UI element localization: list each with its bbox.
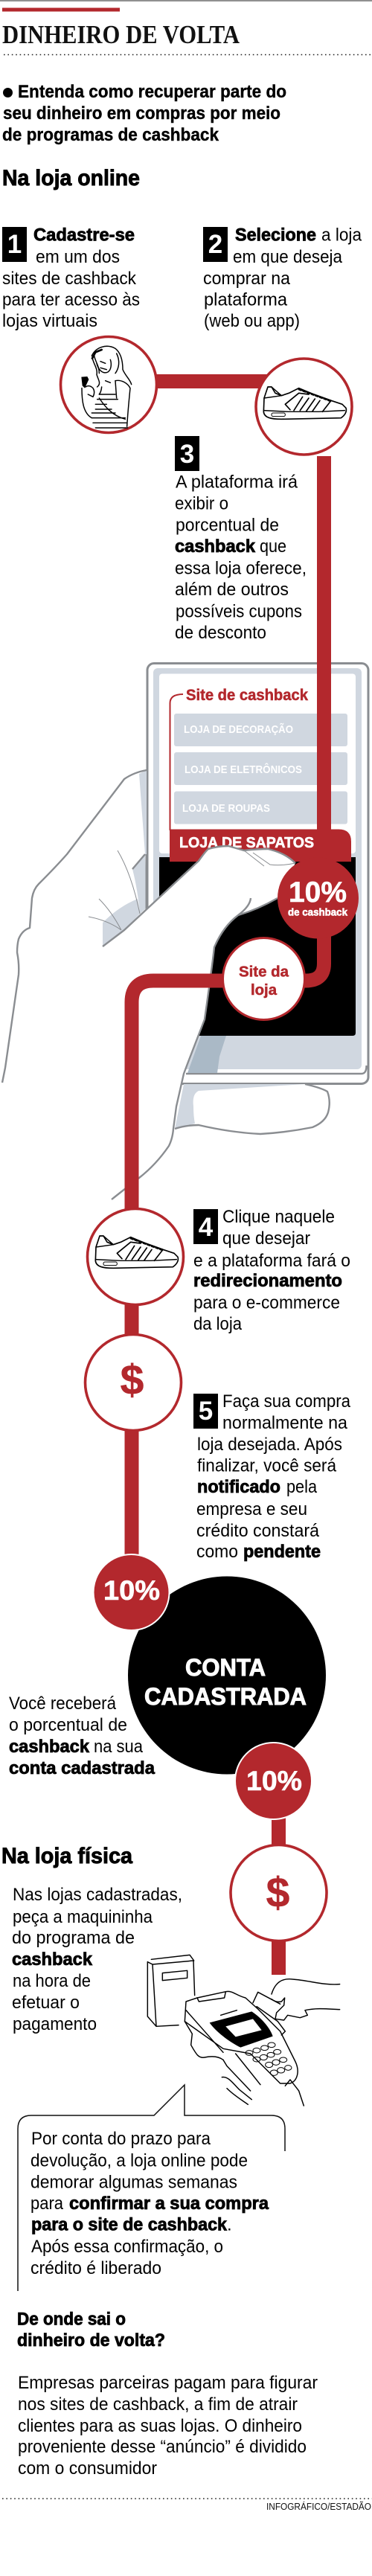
step 4: que desejar xyxy=(222,1228,310,1249)
intro text: seu dinheiro em compras por meio xyxy=(3,103,280,124)
selected store row xyxy=(170,829,351,862)
step 1: em um dos xyxy=(36,247,120,267)
step 3: essa loja oferece, xyxy=(175,558,307,579)
step 5: notificado xyxy=(197,1477,280,1497)
step 5: normalmente na xyxy=(222,1413,348,1433)
text: loja fisica: peça a maquininha xyxy=(13,1907,153,1927)
circle: dollar online xyxy=(85,1335,182,1430)
store list rows: LOJA DE ELETRÔNICOS xyxy=(185,763,302,776)
text: loja fisica: cashback xyxy=(12,1949,93,1970)
title: DINHEIRO DE VOLTA xyxy=(2,20,240,49)
step 3: cashback xyxy=(175,536,256,557)
circle: shoe top xyxy=(256,359,352,455)
red flow line: online store path xyxy=(132,456,324,1563)
callout: 10% de cashback: de cashback xyxy=(288,906,347,918)
callout: confirmation note: confirmar a sua compra xyxy=(69,2194,269,2214)
step 2: 2 xyxy=(208,230,222,259)
step 2: em que deseja xyxy=(233,247,343,267)
text: de onde sai: clientes para as suas lojas. O dinheiro xyxy=(18,2416,302,2436)
text: conta cadastrada note xyxy=(9,1694,155,1778)
step 2: Selecione xyxy=(235,225,316,246)
text: conta cadastrada note: na sua xyxy=(94,1737,144,1757)
heading: na loja fisica: Na loja física xyxy=(1,1844,132,1868)
step 3: que xyxy=(260,536,286,557)
intro text: de programas de cashback xyxy=(2,125,219,145)
step 1: Cadastre-se xyxy=(33,225,135,246)
step 1: sites de cashback xyxy=(2,269,137,289)
circle: site da loja: loja xyxy=(251,982,278,999)
step 5: Faça sua compra xyxy=(222,1391,351,1412)
step 4: Clique naquele xyxy=(222,1207,335,1227)
bezel shadow xyxy=(187,1036,226,1073)
step 1 xyxy=(2,225,140,331)
site de cashback label: Site de cashback xyxy=(186,687,308,704)
step 3: de desconto xyxy=(175,623,266,643)
circle: dollar store xyxy=(231,1845,327,1941)
callout: confirmation note: Após essa confirmação, o xyxy=(31,2237,223,2257)
step 2: comprar na xyxy=(203,269,291,289)
callout: confirmation note: demorar algumas semanas xyxy=(31,2173,237,2192)
text: conta cadastrada note: conta cadastrada xyxy=(9,1758,155,1778)
callout: confirmation note: . xyxy=(227,2214,232,2235)
callout: confirmation note: devolução, a loja online pode xyxy=(31,2150,248,2171)
hand illustration xyxy=(0,770,330,1199)
callout: confirmation note xyxy=(18,2085,285,2291)
step 4: redirecionamento xyxy=(193,1271,342,1291)
store list rows: LOJA DE ROUPAS xyxy=(182,802,270,815)
step 5: empresa e seu xyxy=(196,1499,307,1519)
selected store row: LOJA DE SAPATOS xyxy=(179,835,314,851)
intro text xyxy=(2,82,286,145)
step 1: lojas virtuais xyxy=(2,311,97,331)
text: de onde sai: nos sites de cashback, a fim de atrair xyxy=(18,2394,298,2415)
text: de onde sai: proveniente desse “anúncio” é dividido xyxy=(18,2437,307,2457)
step 3: porcentual de xyxy=(176,515,279,536)
text: de onde sai: com o consumidor xyxy=(18,2458,157,2479)
text: loja fisica: efetuar o xyxy=(12,1993,80,2013)
circle: 10% left xyxy=(94,1554,170,1630)
circle: conta cadastrada: CADASTRADA xyxy=(144,1683,307,1710)
step 3: exibir o xyxy=(175,494,228,513)
icon: sneaker xyxy=(95,1236,178,1268)
subheading: de onde sai: De onde sai o xyxy=(17,2310,126,2329)
text: loja fisica: na hora de xyxy=(13,1971,91,1991)
text: loja fisica xyxy=(12,1885,182,2034)
step 4: 4 xyxy=(199,1213,214,1242)
step 5: como xyxy=(196,1542,238,1562)
circle: site da loja: Site da xyxy=(239,964,289,981)
callout: confirmation note: crédito é liberado xyxy=(31,2258,161,2278)
step 1: 1 xyxy=(7,230,22,259)
circle: dollar online: $ xyxy=(121,1356,144,1404)
step 5: pendente xyxy=(243,1542,321,1562)
icon: woman xyxy=(81,346,132,428)
text: loja fisica: pagamento xyxy=(13,2014,97,2034)
circle: site da loja xyxy=(223,938,305,1019)
callout: 10% de cashback: 10% xyxy=(289,877,347,909)
step 3 xyxy=(175,436,307,643)
step 3: possíveis cupons xyxy=(176,601,302,622)
text: loja fisica: do programa de xyxy=(12,1928,135,1948)
icon: sneaker xyxy=(263,387,346,419)
step 4: para o e-commerce xyxy=(193,1293,340,1313)
callout: 10% de cashback xyxy=(278,857,359,939)
step 3: A plataforma irá xyxy=(176,472,298,493)
step 4: e a plataforma fará o xyxy=(193,1251,350,1271)
circle: shoe bottom xyxy=(88,1208,183,1305)
phone illustration xyxy=(147,664,368,1083)
store list rows xyxy=(174,714,347,824)
circle: woman with phone xyxy=(61,336,156,433)
connector: woman to shoe xyxy=(156,374,268,388)
step 5: 5 xyxy=(199,1397,213,1426)
step 5 xyxy=(193,1391,351,1562)
circle: 10% left: 10% xyxy=(103,1575,160,1606)
circle: dollar store: $ xyxy=(266,1869,289,1917)
callout: confirmation note: Por conta do prazo para xyxy=(31,2129,211,2149)
circle: conta cadastrada xyxy=(128,1576,326,1774)
subheading: de onde sai xyxy=(17,2310,165,2351)
text: conta cadastrada note: Você receberá xyxy=(9,1694,117,1714)
text: de onde sai xyxy=(18,2373,318,2479)
text: de onde sai: Empresas parceiras pagam para figurar xyxy=(18,2373,318,2393)
heading: na loja online: Na loja online xyxy=(2,166,140,190)
step 3: 3 xyxy=(180,440,194,469)
red flow line: physical store xyxy=(272,1816,286,1975)
subheading: de onde sai: dinheiro de volta? xyxy=(17,2330,165,2351)
callout: confirmation note: para xyxy=(31,2194,64,2214)
step 5: loja desejada. Após xyxy=(197,1435,342,1455)
circle: 10% right: 10% xyxy=(246,1766,302,1796)
step 2: a loja xyxy=(321,225,362,246)
step 4: da loja xyxy=(193,1314,243,1334)
header accent bar xyxy=(2,7,120,12)
step 5: finalizar, você será xyxy=(197,1455,337,1476)
circle: conta cadastrada: CONTA xyxy=(185,1654,266,1681)
step 3: além de outros xyxy=(175,580,289,600)
step 1: para ter acesso às xyxy=(2,290,140,310)
store list rows: LOJA DE DECORAÇÃO xyxy=(184,723,293,736)
circle: 10% right xyxy=(235,1743,312,1819)
illustration: card machine xyxy=(147,1955,340,2106)
step 2: plataforma xyxy=(204,290,288,310)
text: conta cadastrada note: cashback xyxy=(9,1737,90,1757)
intro text: Entenda como recuperar parte do xyxy=(18,82,286,102)
step 2: (web ou app) xyxy=(204,311,300,331)
text: conta cadastrada note: o porcentual de xyxy=(9,1715,127,1735)
step 5: pela xyxy=(286,1477,318,1497)
callout: confirmation note: para o site de cashback xyxy=(31,2214,228,2235)
step 5: crédito constará xyxy=(196,1521,320,1541)
text: loja fisica: Nas lojas cadastradas, xyxy=(13,1885,182,1905)
step 4 xyxy=(193,1207,350,1334)
step 2 xyxy=(203,225,362,331)
